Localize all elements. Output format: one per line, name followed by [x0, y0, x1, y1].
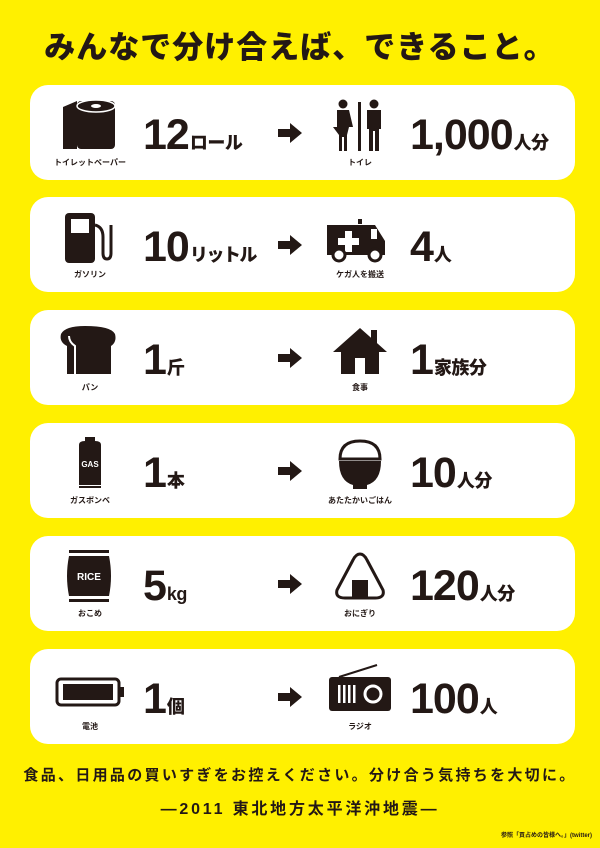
label: ケガ人を搬送 [336, 270, 384, 279]
label: あたたかいごはん [328, 496, 392, 505]
label: トイレットペーパー [54, 158, 126, 167]
label: ラジオ [348, 722, 372, 731]
result: 100人 [410, 675, 497, 723]
icon: ambulance [327, 219, 385, 262]
icon: fuel pump [65, 213, 112, 263]
icon: onigiri [335, 552, 385, 600]
footer event: ―2011 東北地方太平洋沖地震― [161, 801, 439, 818]
panel: rice [30, 536, 575, 631]
icon: battery [56, 678, 124, 706]
icon: house [333, 328, 387, 374]
quantity: 1個 [143, 675, 184, 723]
icon: bread [60, 326, 116, 374]
label: 食事 [352, 383, 368, 392]
panel: gas can [30, 423, 575, 518]
label: パン [82, 383, 98, 392]
panel: toilet paper [30, 85, 575, 180]
icon: gas cylinder: GAS [81, 460, 99, 469]
icon: rice bag [67, 550, 111, 602]
result: 1,000人分 [410, 111, 549, 159]
title: みんなで分け合えば、できること。 [44, 30, 556, 65]
panel: gasoline [30, 197, 575, 292]
arrow [278, 461, 302, 481]
result: 1家族分 [410, 336, 486, 384]
arrow [278, 348, 302, 368]
icon: rice bag: RICE [77, 572, 101, 583]
panel: battery [30, 649, 575, 744]
icon: radio [329, 664, 391, 711]
icon: rice bowl [338, 440, 382, 489]
label: おこめ [78, 609, 102, 618]
result: 120人分 [410, 562, 515, 610]
result: 4人 [410, 223, 451, 271]
quantity: 12ロール [143, 111, 242, 159]
footer message: 食品、日用品の買いすぎをお控えください。分け合う気持ちを大切に。 [23, 767, 577, 784]
arrow [278, 123, 302, 143]
label: トイレ [348, 158, 372, 167]
quantity: 5kg [143, 562, 187, 610]
label: ガソリン [74, 270, 106, 279]
quantity: 1本 [143, 449, 184, 497]
label: ガスボンベ [70, 496, 110, 505]
arrow [278, 687, 302, 707]
arrow [278, 235, 302, 255]
arrow [278, 574, 302, 594]
result: 10人分 [410, 449, 492, 497]
quantity: 1斤 [143, 336, 184, 384]
label: 電池 [82, 722, 98, 731]
quantity: 10リットル [143, 223, 256, 271]
icon: toilet [333, 100, 381, 151]
icon: gas cylinder [79, 437, 101, 488]
panel: bread [30, 310, 575, 405]
label: おにぎり [344, 609, 376, 618]
source note: 参照「買占めの皆様へ。」(twitter) [501, 833, 592, 839]
icon: toilet paper [63, 100, 115, 149]
